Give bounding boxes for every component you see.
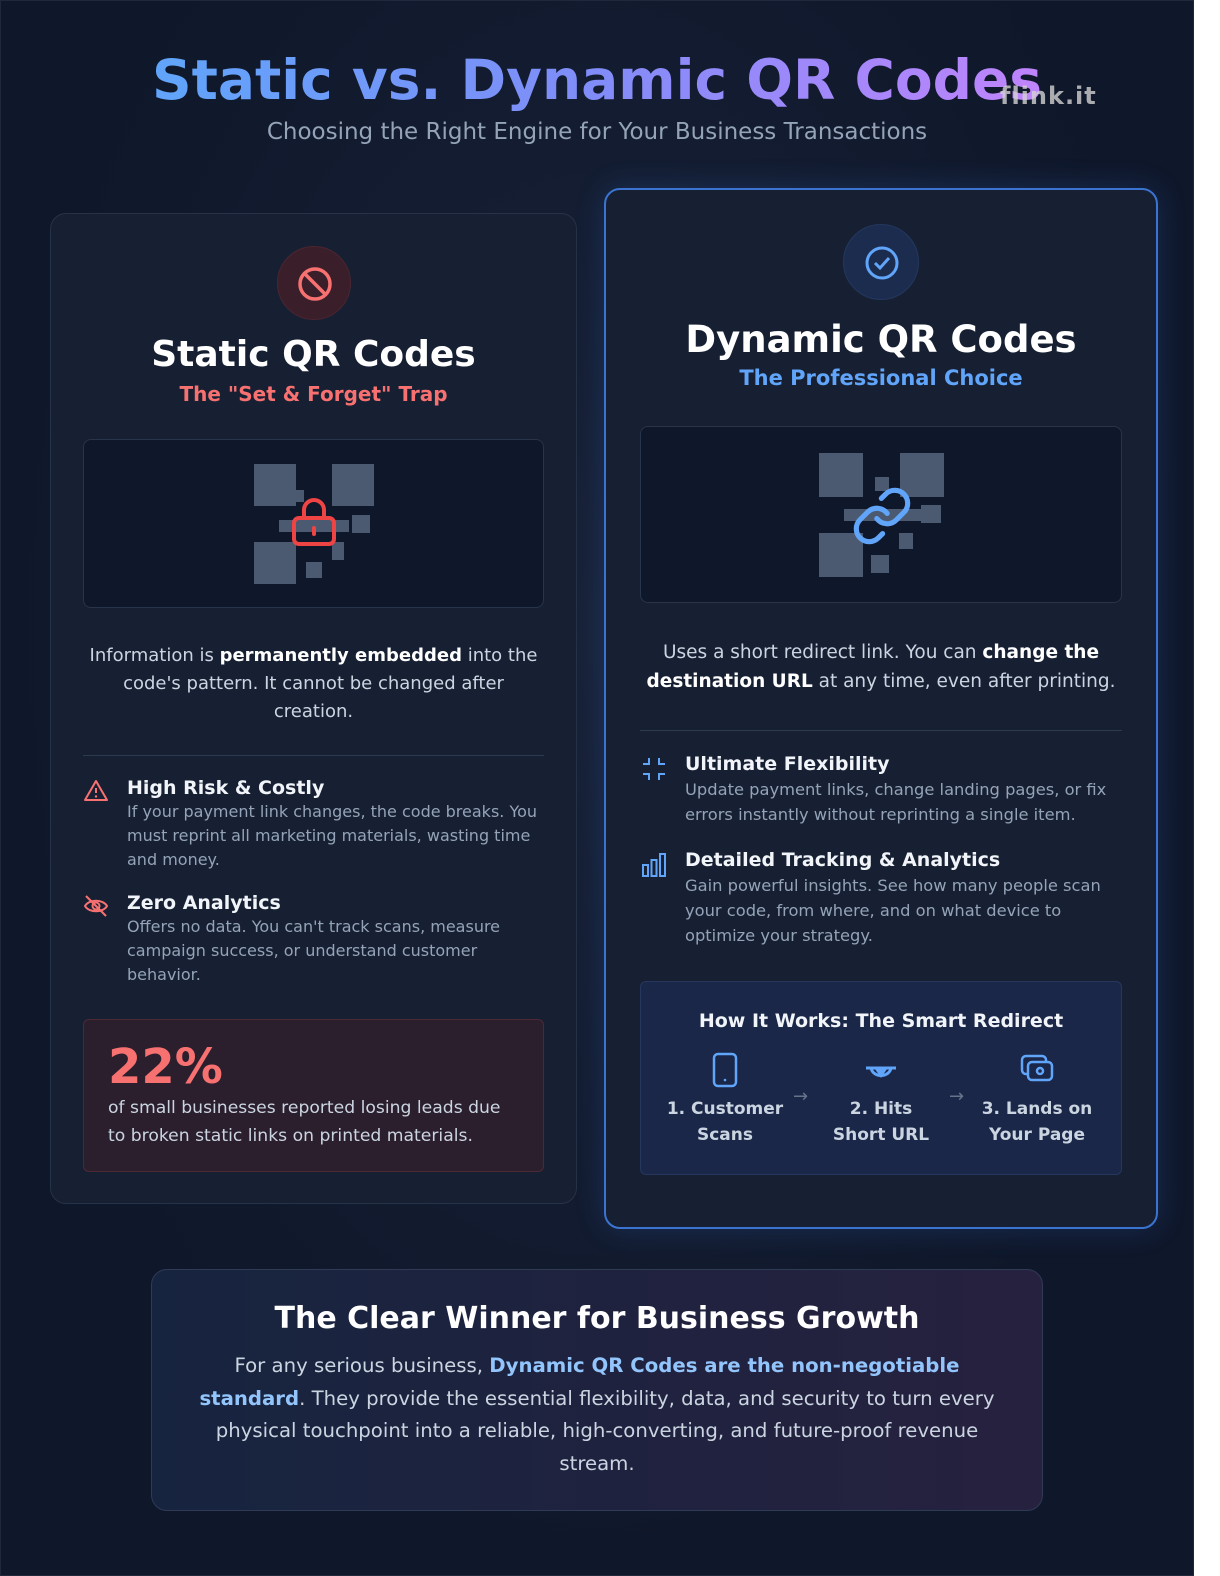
feature: flexibility	[643, 753, 1106, 824]
step 2: Short URL	[833, 1125, 929, 1145]
step 1: 1. Customer	[667, 1099, 783, 1119]
icon: eye off	[84, 895, 108, 917]
panel: static	[50, 213, 577, 1204]
feature: analytics: Detailed Tracking & Analytics	[685, 849, 1000, 871]
icon: bar chart	[642, 853, 666, 877]
how it works box	[640, 981, 1122, 1175]
how it works box: How It Works: The Smart Redirect	[699, 1010, 1063, 1032]
step 3: Your Page	[989, 1125, 1085, 1145]
stat callout: 22%	[108, 1039, 223, 1095]
qr link image	[640, 426, 1122, 603]
qr lock image	[83, 439, 544, 608]
heading: Static QR Codes	[151, 334, 476, 375]
stat callout: to broken static links on printed materials.	[108, 1126, 473, 1146]
feature: zero analytics: Offers no data. You can't track scans, measure campaign success, or understand customer behavior.	[127, 917, 500, 984]
feature: analytics	[642, 849, 1101, 945]
stat callout: of small businesses reported losing leads due	[108, 1098, 500, 1118]
icon: expand	[643, 758, 665, 780]
arrow: →	[949, 1086, 964, 1107]
feature: high risk: If your payment link changes, the code breaks. You must reprint all marketing materials, wasting time and money.	[127, 802, 537, 869]
conclusion panel	[151, 1269, 1043, 1511]
panel: dynamic	[604, 188, 1158, 1229]
heading: Dynamic QR Codes	[685, 318, 1077, 361]
feature: flexibility: Ultimate Flexibility	[685, 753, 890, 775]
subtitle: Choosing the Right Engine for Your Business Transactions	[267, 119, 927, 145]
subheading: The Professional Choice	[739, 366, 1023, 390]
feature: zero analytics	[84, 892, 500, 984]
description: Uses a short redirect link. You can change the destination URL at any time, even after printing.	[647, 642, 1115, 692]
step 3: 3. Lands on	[982, 1099, 1092, 1119]
step 2	[833, 1066, 929, 1145]
icon: check	[843, 224, 919, 300]
step 1	[667, 1052, 784, 1145]
icon: ban	[277, 246, 351, 320]
feature: high risk	[84, 777, 537, 869]
arrow: →	[793, 1086, 808, 1107]
subheading: The "Set & Forget" Trap	[179, 382, 448, 406]
step 2: 2. Hits	[850, 1099, 912, 1119]
feature: flexibility: Update payment links, change landing pages, or fix errors instantly without reprinting a single item.	[685, 780, 1106, 824]
feature: high risk: High Risk & Costly	[127, 777, 324, 799]
step 1: Scans	[697, 1125, 753, 1145]
watermark: flink.it	[1000, 82, 1097, 110]
icon: warning	[84, 780, 108, 801]
description: Information is permanently embedded into the code's pattern. It cannot be changed after creation.	[90, 645, 537, 722]
step 3	[982, 1054, 1092, 1145]
title: Static vs. Dynamic QR Codes	[152, 48, 1042, 112]
conclusion text: For any serious business, Dynamic QR Codes are the non-negotiable standard. They provide the essential flexibility, data, and security to turn every physical touchpoint into a reliable, high-converting, and future-proof revenue stream.	[199, 1354, 995, 1474]
stat callout	[83, 1019, 544, 1172]
conclusion heading: The Clear Winner for Business Growth	[274, 1301, 920, 1336]
feature: zero analytics: Zero Analytics	[127, 892, 281, 914]
feature: analytics: Gain powerful insights. See how many people scan your code, from where, and on what device to optimize your strategy.	[685, 876, 1101, 945]
